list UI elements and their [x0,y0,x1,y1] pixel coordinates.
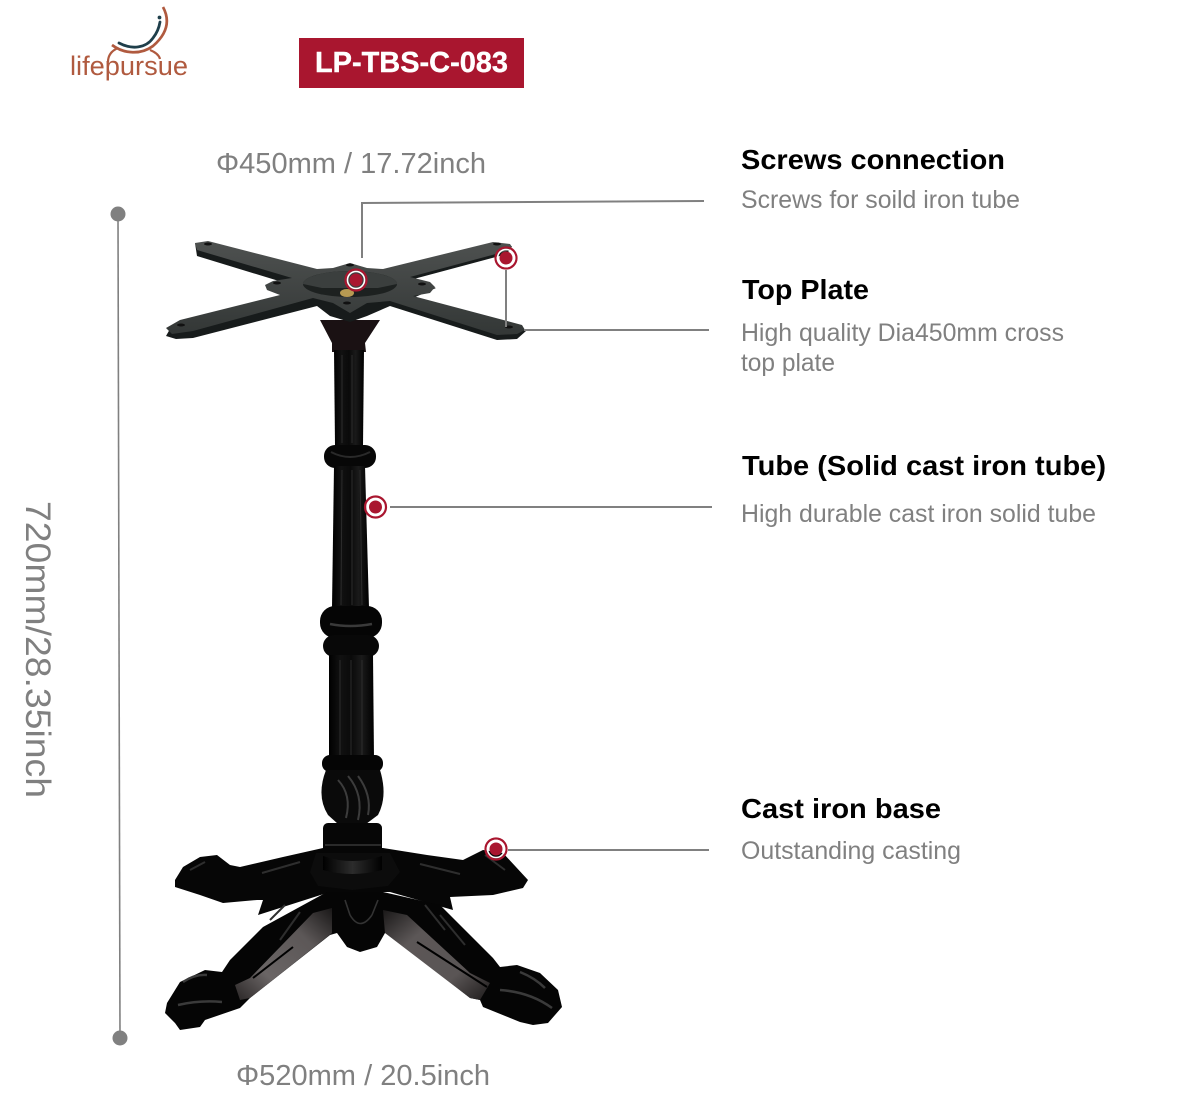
callout: top plate [741,274,1064,377]
leader: cast iron base [508,849,709,851]
model number badge: LP-TBS-C-083 [315,47,508,79]
callout: cast iron base: Cast iron base [741,793,941,824]
cast iron legs [165,848,562,1030]
height dimension line [110,206,128,1046]
logo: lifepursue [70,7,188,81]
callout: cast iron base: Outstanding casting [741,837,961,865]
callout: top plate: Top Plate [742,274,869,305]
marker: cast iron base [486,838,506,860]
top plate [166,241,526,340]
callout: screws connection: Screws for soild iron tube [741,186,1020,214]
callout: tube: High durable cast iron solid tube [741,500,1096,528]
column [320,320,384,855]
bottom diameter dimension: Φ520mm / 20.5inch [236,1060,490,1092]
leader: top plate [506,270,709,330]
height dimension label: 720mm/28.35inch [18,501,57,798]
marker: top plate [496,248,516,268]
table base product [165,241,562,1030]
marker: screws connection [346,270,366,290]
leader: tube [390,506,712,508]
callout: cast iron base [741,793,961,865]
callout: tube [741,450,1106,528]
marker: tube [365,496,386,518]
callout: screws connection: Screws connection [741,144,1005,175]
callout: top plate: High quality Dia450mm cross [741,319,1064,347]
callout: tube: Tube (Solid cast iron tube) [742,450,1106,481]
callout: top plate: top plate [741,349,835,377]
top diameter dimension: Φ450mm / 17.72inch [216,148,486,180]
model number badge [299,38,524,88]
leader: screws connection [362,201,704,258]
logo: lifepursue: lifepursue [70,51,188,81]
callout: screws connection [741,144,1020,214]
